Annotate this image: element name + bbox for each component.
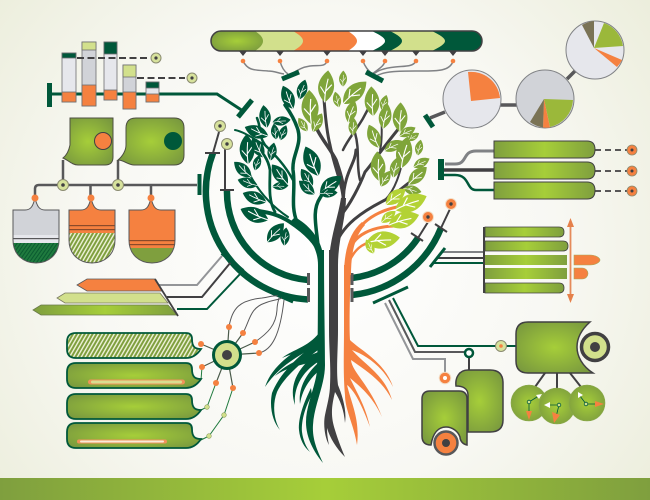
green branches [235,105,332,260]
lime leaves [362,184,430,256]
right comb bars with orange arrow [430,218,600,303]
segmented top bar [211,31,482,81]
dark green leaves [230,78,345,246]
orange trunk and roots [344,265,393,445]
callout boxes and flasks tree [13,118,200,263]
orange trunk taper [344,222,365,275]
tree [230,70,432,463]
gray branches [309,90,413,250]
bottom-right machine diagram [385,298,608,454]
pie charts [425,21,624,128]
right rounded bars with dashed leaders [441,141,637,199]
left stacked arrows [33,253,243,316]
olive leaves [295,70,432,196]
gray trunk and roots [324,250,345,457]
green trunk and roots [265,250,325,463]
stacked bar chart [47,42,252,117]
gray trunk taper [329,198,346,265]
bottom-left pills and hub [67,296,284,448]
green trunk taper [290,217,324,265]
central arcs [205,120,456,303]
bottom band [0,478,650,500]
orange branches [347,207,403,268]
